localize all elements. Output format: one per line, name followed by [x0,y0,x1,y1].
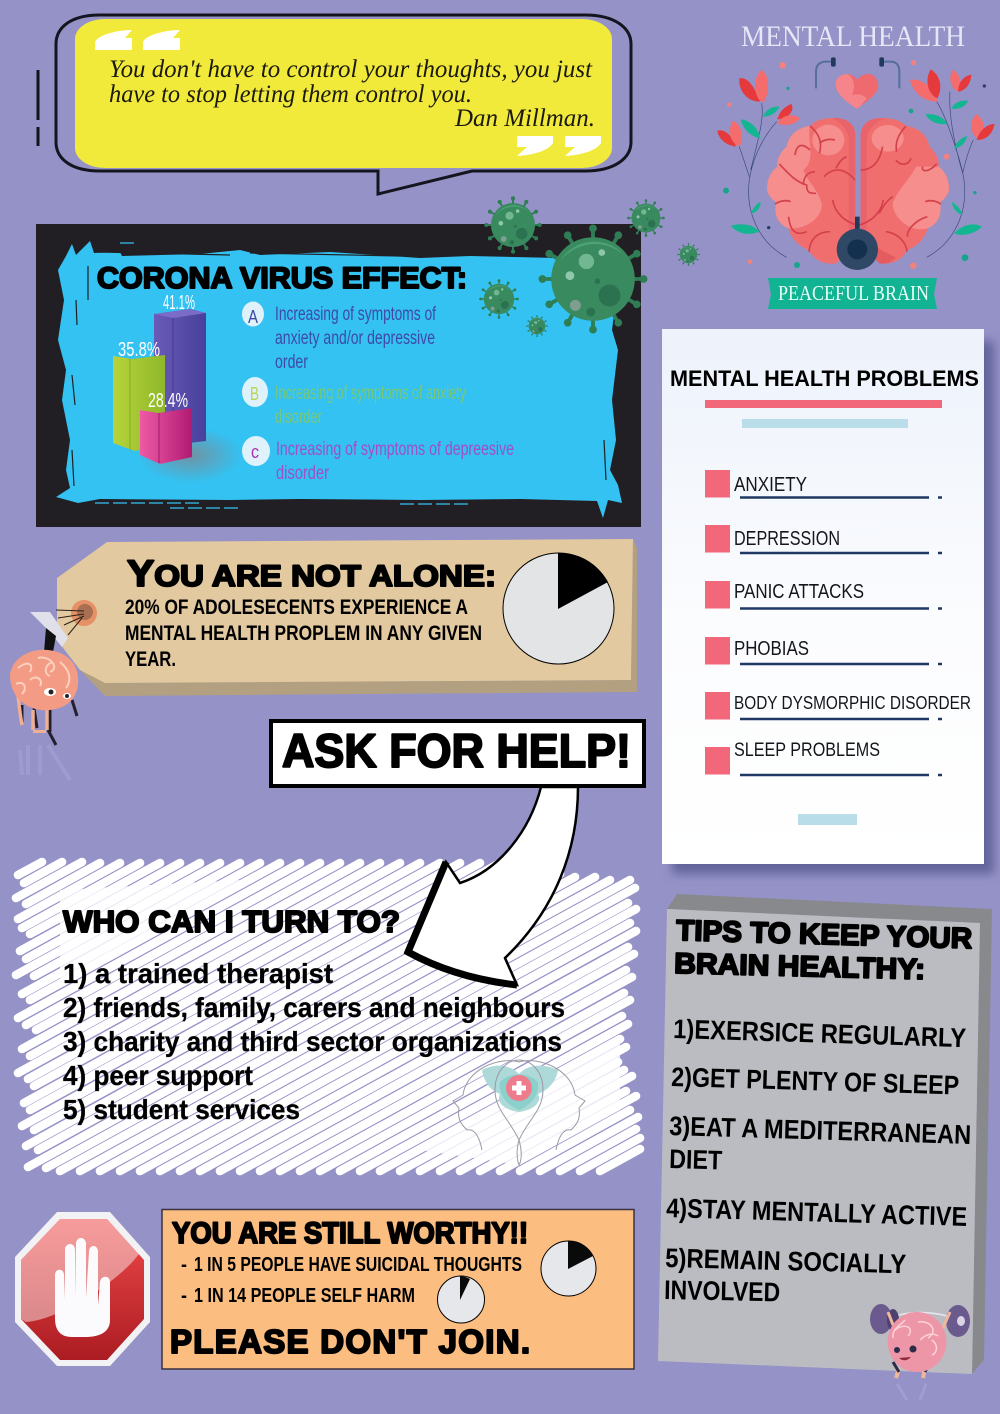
heart [836,74,878,109]
legend item C: Increasing of symptoms of depreesive [276,439,514,460]
tag body text: MENTAL HEALTH PROPLEM IN ANY GIVEN [125,622,482,645]
panel heading: MENTAL HEALTH PROBLEMS [670,366,979,391]
panel heading: YOU ARE STILL WORTHY!! [172,1217,528,1250]
item: phobias: PHOBIAS [734,638,809,660]
icon: large virus [539,225,647,333]
tips list: INVOLVED [664,1275,780,1307]
item: panic attacks: PANIC ATTACKS [734,581,864,603]
item: sleep problems [705,740,942,775]
section heading: WHO CAN I TURN TO? [63,904,400,939]
panel: you are not alone tag [56,539,637,696]
numbered list: 4) peer support [63,1060,253,1091]
brain hemispheres [767,118,949,264]
legend item A: anxiety and/or depressive [275,328,435,349]
icon: two heads with medical cross [453,1060,585,1165]
panel: mental health problems [662,329,994,874]
panel background [662,329,984,864]
bubble outline with tail [56,15,631,194]
banner: peaceful brain [768,278,937,309]
item: body dysmorphic disorder [705,692,971,720]
stethoscope [816,57,899,270]
icon: virus small [526,315,548,337]
tips list: DIET [669,1144,723,1175]
statistics lines [181,1254,522,1307]
bar value labels: 41.1% [163,292,195,314]
quote text: Dan Millman. [454,105,595,132]
red heading bar [705,400,942,408]
pale heading bar [742,419,908,428]
quote text: have to stop letting them control you. [109,81,472,108]
blue brush flecks [95,243,500,508]
item: anxiety: ANXIETY [734,474,807,496]
icon: stop sign with hand [15,1212,150,1366]
numbered list: 1) a trained therapist [63,958,333,989]
bottom accent bar [798,814,857,825]
blue brushed area [56,241,622,518]
panel: you are still worthy [162,1210,634,1369]
quote text: You don't have to control your thoughts, you just [109,56,593,83]
panel: who can I turn to [16,862,640,1171]
legend item C [242,436,514,484]
banner: peaceful brain: PEACEFUL BRAIN [778,281,929,305]
tag body text: YEAR. [125,648,176,671]
tag body [57,539,633,683]
dark brush and blue streaks [72,252,606,486]
white fill behind upper left and lower right scribble [60,880,620,1165]
statistics lines: 1 IN 5 PEOPLE HAVE SUICIDAL THOUGHTS [194,1254,522,1276]
icon: sad brain character [10,612,78,780]
title: MENTAL HEALTH [741,20,965,53]
tips list: 2)GET PLENTY OF SLEEP [671,1062,960,1101]
leaves [731,101,982,235]
legend item A [242,302,437,373]
statistics lines: - [181,1285,187,1307]
legend item B: disorder [275,407,322,428]
panel heading: TIPS TO KEEP YOUR [676,915,973,955]
icon: virus far right [677,243,700,266]
panel: quote speech bubble [56,15,631,194]
legend item B: B [250,384,259,404]
statistics lines: 1 IN 14 PEOPLE SELF HARM [194,1285,415,1307]
legend item C: disorder [276,463,330,484]
tips list [664,1014,972,1307]
panel shadow [672,341,994,874]
icon: virus top [484,196,542,254]
panel heading: BRAIN HEALTHY: [674,948,926,986]
item: sleep problems: SLEEP PROBLEMS [734,740,880,761]
tag heading: YOU ARE NOT ALONE: [127,553,496,594]
flower stems [739,92,973,257]
numbered list: 2) friends, family, carers and neighbours [63,992,565,1023]
bar value labels: 35.8% [118,339,160,361]
quote text [109,56,595,132]
pie chart 1 in 5 [541,1241,596,1296]
panel 3D edge [667,894,992,1374]
white scribble background [16,862,640,1171]
panel face [658,909,980,1374]
item: anxiety [705,470,942,498]
legend item A: Increasing of symptoms of [275,304,437,325]
decorative dots [723,60,986,269]
legend item A: A [248,307,258,327]
side marks beside quote [36,70,40,146]
icon: peaceful brain illustration [717,57,995,270]
icon: virus top right [627,199,665,237]
pie chart 1 in 14 [438,1276,484,1323]
closing quote marks [517,136,601,156]
3D bar chart [113,292,242,483]
black panel background [36,224,641,527]
arrow from ask for help [408,787,578,985]
legend item A: order [275,352,308,373]
flowers [717,69,995,147]
numbered list: 3) charity and third sector organizations [63,1026,562,1057]
tag body text: 20% OF ADOLESECENTS EXPERIENCE A [125,596,468,619]
closing message: PLEASE DON'T JOIN. [170,1323,530,1360]
yellow quote area [75,19,612,168]
item: phobias [705,637,942,664]
panel: tips to keep your brain healthy [658,894,992,1374]
panel heading: CORONA VIRUS EFFECT: [97,262,467,295]
legend item B [242,377,466,428]
item: depression [705,525,942,553]
bar value labels: 28.4% [148,390,188,412]
legend item B: Increasing of symptoms of anxiety [275,383,466,404]
tips list: 5)REMAIN SOCIALLY [665,1243,907,1279]
pie chart 20 percent [503,553,614,664]
panel: corona virus effect [36,224,641,527]
panel heading [674,915,973,986]
legend item C: c [251,442,259,462]
item: panic attacks [705,581,942,608]
bar value labels [118,292,195,412]
opening quote marks [95,30,180,50]
item: depression: DEPRESSION [734,528,840,550]
heading box: ask for help: ASK FOR HELP! [282,724,631,777]
numbered list: 5) student services [63,1094,300,1125]
statistics lines: - [181,1254,187,1276]
tag hole with string [56,600,97,635]
icon: virus mid [479,279,519,319]
numbered list [63,958,565,1125]
icon: weightlifting brain character [870,1304,970,1400]
tips list: 1)EXERSICE REGULARLY [673,1014,967,1053]
tag body text [125,596,482,671]
tag shadow edge [78,539,637,696]
